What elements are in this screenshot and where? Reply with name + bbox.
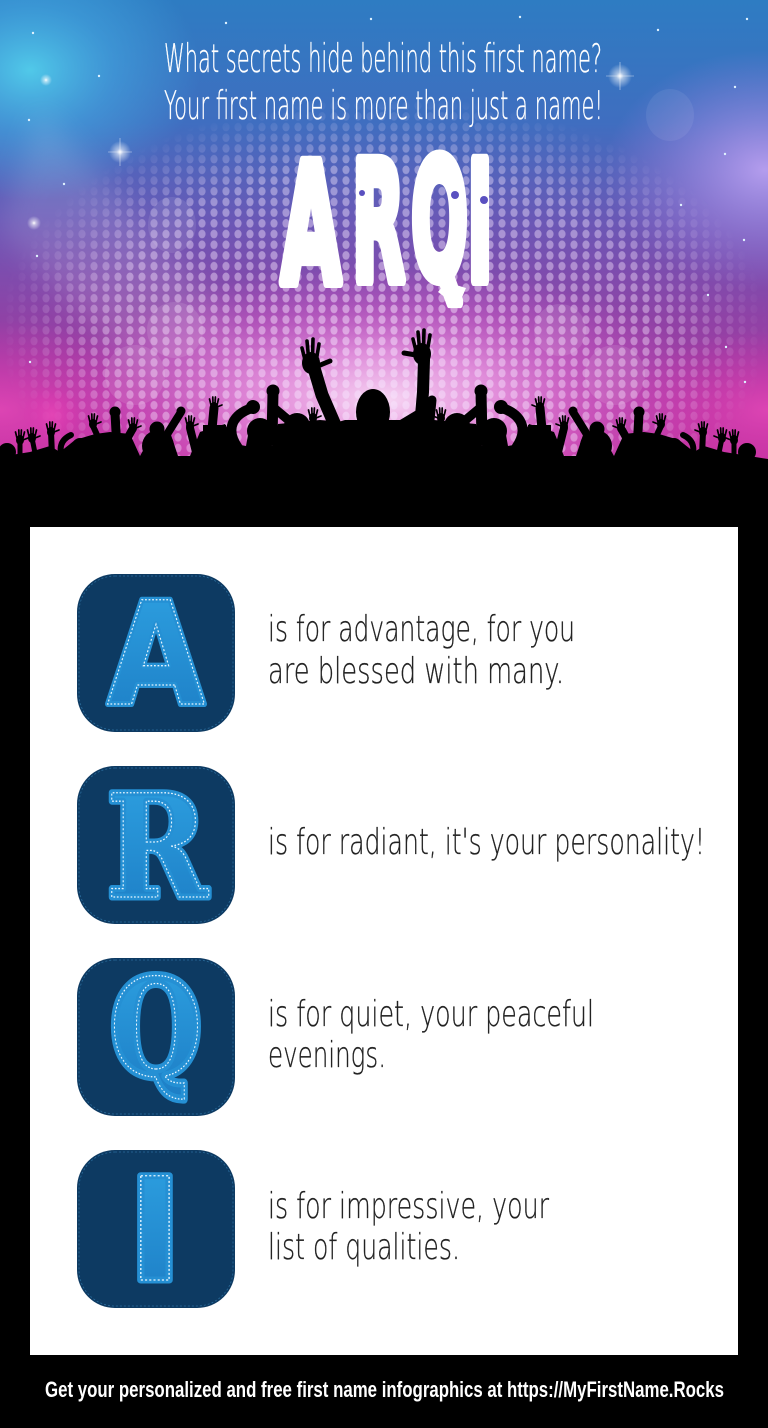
name title: ARQI: Q [411,125,468,317]
name title: ARQI: A [281,129,341,321]
text: Q line [268,994,594,1076]
headline [164,37,603,129]
row Q [77,949,594,1116]
main figure [302,330,442,470]
icon: letter I [77,1147,235,1314]
text: Q line: evenings. [268,1035,386,1076]
icon: letter A: A [107,571,205,738]
header background [0,0,768,459]
icon: letter Q: Q [110,949,202,1107]
text: Q line: is for quiet, your peaceful [268,994,594,1035]
icon: letter R: R [106,763,209,931]
name title: ARQI: R [352,127,405,319]
name title: ARQI [281,125,493,321]
text: A line [268,609,575,692]
icon: letter Q: Q [110,949,202,1107]
row I [77,1147,549,1314]
text: I line [268,1186,549,1268]
text: I line: list of qualities. [268,1227,460,1268]
text: A line: is for advantage, for you [268,609,575,650]
icon: letter Q [77,949,235,1116]
text: I [467,127,493,319]
crowd silhouette [0,330,768,528]
content panel [30,527,738,1355]
icon: letter I: I [127,1147,183,1314]
row R [77,763,705,931]
row A [77,571,575,738]
icon: letter R: R [106,763,209,931]
icon: letter I: I [127,1147,183,1314]
text: I line: is for impressive, your [268,1186,549,1227]
text: A line: are blessed with many. [268,651,564,692]
icon: letter A: A [107,571,205,738]
